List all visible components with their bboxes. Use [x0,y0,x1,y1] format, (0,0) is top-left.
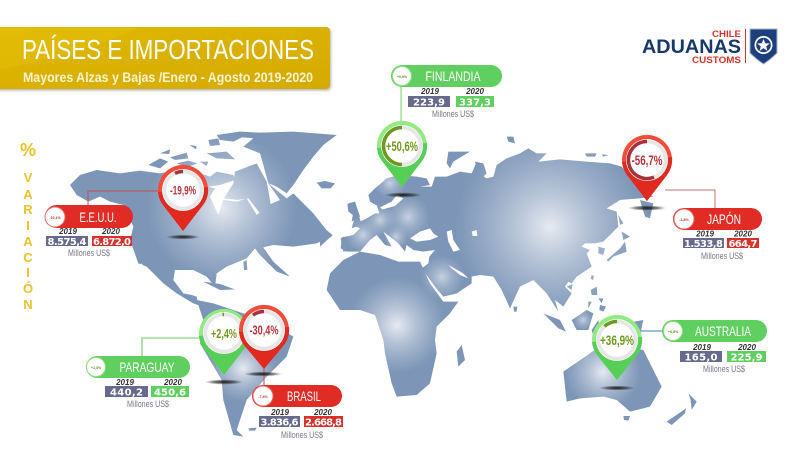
panel: Japón: -1,8% [679,218,689,222]
panel: Brasil: 3.836,6 [260,418,299,428]
pin: E.E.U.U. -19,9% [158,165,208,239]
panel: Japón: JAPÓN [707,211,741,227]
panel: Finlandia [391,65,502,119]
panel: Australia: 165,0 [684,352,718,364]
% variación vertical label: I [26,218,30,233]
pin: Brasil -30,4%: -30,4% [250,324,278,338]
panel: Australia: 2019 [692,343,711,352]
panel: Australia: +0,8% [668,330,679,334]
panel: Finlandia: 223,9 [413,98,445,108]
panel: Finlandia: FINLANDIA [426,68,481,84]
panel: Brasil: 2019 [270,408,289,417]
panel: Australia: 225,9 [730,352,763,364]
panel: Japón: 2019 [695,230,714,238]
logo: Aduanas Chile [642,29,777,65]
logo: Aduanas Chile: ADUANAS [642,36,741,58]
% variación vertical label: C [23,250,33,265]
panel: Paraguay: 2020 [163,378,182,387]
panel: Paraguay: Millones US$ [127,399,169,409]
% variación vertical label: A [23,187,33,202]
panel: Paraguay [86,356,190,409]
panel: Brasil: -7,4% [258,395,268,399]
panel: Paraguay: 450,6 [154,388,186,398]
% variación vertical label: V [24,170,33,185]
% variación vertical label: R [23,202,33,217]
panel: Brasil: 2.668,8 [305,418,342,428]
connector: Finlandia [400,87,402,122]
pin: Brasil -30,4% [239,305,289,376]
panel: E.E.U.U.: Millones US$ [68,248,110,258]
panel: E.E.U.U.: 6.872,0 [93,237,131,248]
panel: Brasil: BRASIL [287,388,321,404]
panel: Finlandia: +0,9% [397,75,408,79]
% variación vertical label: Ó [23,281,33,296]
panel: E.E.U.U. [45,205,133,258]
panel: E.E.U.U.: E.E.U.U. [80,209,116,225]
connector: Brasil [263,366,265,386]
panel: Paraguay: 440,2 [110,388,143,398]
logo: Aduanas Chile: CHILE [712,29,741,39]
pin: Australia +36,9% [592,315,642,390]
world map [70,132,697,437]
% variación vertical label [20,140,36,312]
panel: Finlandia: 337,3 [459,98,491,108]
panel: E.E.U.U.: -10,1% [49,216,61,220]
connector: E.E.U.U. [88,191,160,206]
pin: Finlandia +50,6%: +50,6% [386,139,418,154]
logo: Aduanas Chile: CUSTOMS [692,55,741,65]
panel: Paraguay: +1,3% [91,366,102,370]
panel: E.E.U.U.: 8.575,4 [48,237,87,248]
panel: Japón: Millones US$ [701,251,743,261]
subheading: Mayores Alzas y Bajas /Enero - Agosto 2019-2020 [23,69,313,85]
pin: Japón -56,7%: -56,7% [632,153,662,168]
pin: Australia +36,9%: +36,9% [600,333,634,348]
panel: Finlandia: 2019 [420,87,439,96]
connector: Japón [665,190,715,209]
% variación vertical label: % [20,140,36,160]
heading: PAÍSES E IMPORTACIONES [22,34,314,65]
panel: Paraguay: PARAGUAY [120,359,175,375]
connector: Paraguay [142,338,201,357]
connector: Australia [640,330,663,332]
pin: Japón -56,7% [622,135,672,211]
panel: E.E.U.U.: 2020 [101,227,120,236]
panel: E.E.U.U.: 2019 [58,227,77,236]
pin: Finlandia +50,6% [377,121,427,198]
panel: Finlandia: Millones US$ [432,109,474,119]
panel: Australia: AUSTRALIA [695,323,751,339]
panel: Brasil: 2020 [313,408,332,417]
panel: Australia: Millones US$ [703,364,745,374]
pin: Paraguay +2,4%: +2,4% [211,326,237,341]
panel: Australia: 2020 [737,343,756,352]
pin: Paraguay +2,4% [199,309,249,385]
% variación vertical label: N [23,297,33,312]
panel: Japón: 664,7 [728,239,758,250]
icon: customs shield [750,29,777,64]
panel: Brasil: Millones US$ [281,430,323,440]
pin: E.E.U.U. -19,9%: -19,9% [170,184,196,198]
panel: Brasil [252,385,343,440]
panel: Japón: 2020 [733,230,752,238]
panel: Australia [662,320,767,374]
title banner [0,27,330,89]
panel: Finlandia: 2020 [465,87,484,96]
panel: Paraguay: 2019 [115,378,134,387]
panel: Japón: 1.533,8 [684,239,723,250]
% variación vertical label: A [23,234,33,249]
panel: Japón [673,208,762,261]
% variación vertical label: I [26,265,30,280]
